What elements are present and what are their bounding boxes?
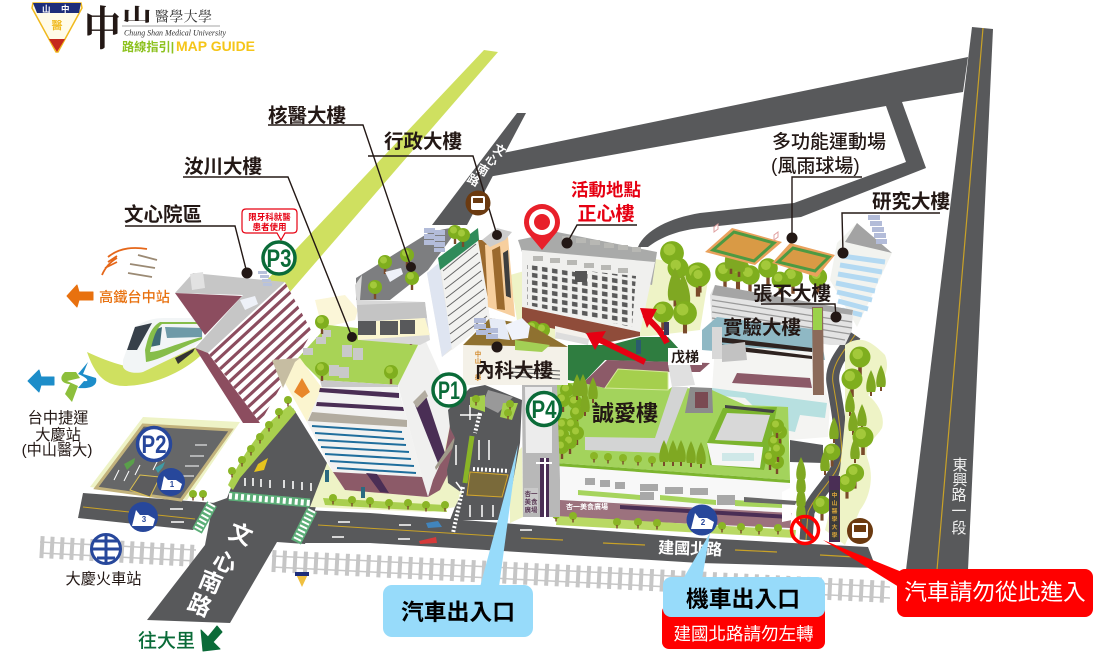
logo shield: 山 bbox=[42, 4, 51, 14]
building: internal medicine: 山 bbox=[475, 356, 481, 365]
road name: Wenxin South Road bbox=[184, 518, 256, 622]
logo: 山 bbox=[122, 1, 152, 27]
label: high speed rail station bbox=[67, 285, 170, 307]
building: nuclear medicine and administration bbox=[355, 225, 515, 357]
label: Ruchuan building: 汝川大樓 bbox=[184, 156, 262, 178]
label: high speed rail station: 高鐵台中站 bbox=[99, 289, 170, 306]
road name: Dongxing Road section 1: 路 bbox=[951, 487, 967, 504]
campus gate sign: 山 bbox=[832, 499, 838, 507]
pedestrians bbox=[636, 322, 669, 354]
red route arrows bbox=[586, 308, 667, 362]
road: Dongxing Road bbox=[906, 27, 993, 570]
label: Cheng Ai building: 誠愛樓 bbox=[592, 401, 658, 426]
label: wind and rain court: (風雨球場) bbox=[771, 155, 860, 177]
building: research bbox=[830, 215, 892, 327]
badge: P3 parking with note bbox=[242, 209, 297, 274]
logo: 路線指引| bbox=[122, 39, 174, 54]
lime rail swoosh bbox=[87, 50, 498, 386]
building: internal medicine: 學 bbox=[475, 373, 482, 382]
light green grounds bbox=[90, 250, 887, 545]
building: internal medicine: 中 bbox=[475, 349, 481, 358]
small crest near rail bbox=[295, 572, 309, 587]
campus gate sign: 中 bbox=[832, 491, 838, 499]
label: Zhang Bu building: 張不大樓 bbox=[753, 283, 831, 305]
label: internal medicine building: 內科大樓 bbox=[475, 360, 553, 382]
building: Wenxin campus bbox=[175, 271, 311, 423]
icon: metro direction bbox=[28, 362, 96, 402]
event location heading: 正心樓 bbox=[577, 203, 635, 225]
campus gate sign bbox=[829, 476, 840, 542]
label: Wu stairs: 戊梯 bbox=[671, 349, 699, 365]
roads bbox=[78, 27, 993, 623]
building labels bbox=[124, 104, 950, 426]
label: Taichung MRT station: 大慶站 bbox=[35, 426, 81, 444]
leader lines bbox=[125, 125, 940, 352]
decor: high speed rail wind lines bbox=[102, 248, 157, 277]
callout: scooter entrance bbox=[663, 533, 825, 617]
label: to Dali direction bbox=[138, 626, 222, 652]
sports courts bbox=[705, 224, 835, 277]
road name: Wenxin South Road: 文 bbox=[225, 518, 256, 551]
building: Zhengxin bbox=[518, 232, 657, 345]
label: to Dali direction: 往大里 bbox=[138, 630, 195, 652]
road name: Dongxing Road section 1: 段 bbox=[951, 520, 967, 537]
label: Taichung MRT station: 台中捷運 bbox=[28, 410, 88, 427]
light rail train bbox=[123, 318, 203, 373]
icon: red location pin bbox=[524, 204, 560, 250]
badge: scooter parking 1: 1 bbox=[170, 480, 175, 489]
campus gate sign: 學 bbox=[832, 515, 838, 523]
label: research building: 研究大樓 bbox=[872, 191, 950, 213]
badge: P3 parking with note: 患者使用 bbox=[252, 222, 287, 232]
label: laboratory building: 實驗大樓 bbox=[723, 316, 801, 339]
event location heading bbox=[571, 180, 641, 225]
label: Wenxin campus: 文心院區 bbox=[124, 203, 202, 226]
road name: upper Wenxin South Road: 路 bbox=[465, 170, 483, 189]
icon: bus stop 2 bbox=[847, 518, 873, 544]
logo shield: 醫 bbox=[52, 19, 62, 32]
badge: scooter parking 2: 2 bbox=[701, 518, 706, 527]
right lane trees bbox=[796, 346, 886, 523]
logo shield: 中 bbox=[61, 4, 70, 14]
road name: Dongxing Road section 1: 東 bbox=[952, 457, 968, 474]
road name: Dongxing Road section 1: 興 bbox=[952, 472, 968, 489]
campus gate sign: 學 bbox=[832, 531, 838, 539]
logo: 醫學大學 bbox=[155, 6, 212, 26]
campus gate sign: 大 bbox=[832, 523, 838, 531]
badge: P3 parking with note: 限牙科就醫 bbox=[248, 212, 291, 222]
small food court sign: 美食 bbox=[524, 497, 538, 506]
railway track bbox=[40, 542, 890, 598]
road name: Dongxing Road section 1: 一 bbox=[951, 503, 967, 520]
road markings bbox=[83, 28, 983, 570]
icon: Taiwan railway logo bbox=[92, 534, 120, 564]
callout: car entrance: 汽車出入口 bbox=[401, 599, 515, 625]
label: Taichung MRT station: (中山醫大) bbox=[22, 442, 92, 459]
logo: Chung Shan Medical University bbox=[124, 28, 226, 38]
callout: no cars warning: 汽車請勿從此進入 bbox=[904, 579, 1086, 605]
logo: MAP GUIDE bbox=[176, 38, 255, 54]
road: winding service lane bbox=[806, 335, 855, 540]
campus gate sign: 醫 bbox=[832, 507, 838, 515]
road: upper Wenxin South Road bbox=[432, 113, 526, 225]
badge: scooter parking 3: 3 bbox=[142, 515, 147, 524]
road name: upper Wenxin South Road bbox=[465, 140, 509, 189]
logo bbox=[32, 0, 255, 58]
building: Ruchuan bbox=[272, 295, 460, 497]
road name: Jianguo North Road: 建國北路 bbox=[658, 538, 723, 559]
road: north lane bbox=[488, 57, 968, 247]
callout: no left turn warning bbox=[662, 605, 825, 649]
badge: P1 parking bbox=[433, 374, 465, 406]
small food court sign: 廣場 bbox=[524, 505, 538, 514]
label: nuclear medicine building: 核醫大樓 bbox=[268, 104, 346, 127]
badge: P3 parking with note: P3 bbox=[266, 245, 292, 273]
label: administration building: 行政大樓 bbox=[384, 131, 462, 153]
label: Daqing railway station: 大慶火車站 bbox=[66, 570, 141, 588]
road: Jianguo North Road east bbox=[300, 510, 876, 568]
callout: no left turn warning: 建國北路請勿左轉 bbox=[674, 624, 814, 644]
badge: P1 parking: P1 bbox=[438, 377, 460, 405]
road name: Wenxin South Road: 心 bbox=[209, 546, 240, 579]
trees north of campus bbox=[526, 240, 827, 342]
road name: Wenxin South Road: 路 bbox=[184, 589, 215, 622]
building: Zhang Bu bbox=[710, 285, 853, 345]
icon: no entry sign bbox=[792, 516, 818, 544]
badge: P4 parking: P4 bbox=[532, 396, 557, 424]
parking lot P2 bbox=[96, 425, 231, 500]
badge: P2 parking: P2 bbox=[142, 431, 166, 459]
label: multipurpose sports field: 多功能運動場 bbox=[772, 131, 886, 153]
road name: upper Wenxin South Road: 心 bbox=[483, 151, 500, 169]
label: Taichung MRT station bbox=[22, 410, 92, 459]
driveway and junction bbox=[447, 385, 560, 533]
badge: scooter parking 2 bbox=[686, 504, 718, 536]
icon: metro stop 1 bbox=[466, 190, 490, 216]
callout: scooter entrance: 機車出入口 bbox=[686, 586, 800, 612]
callout: car entrance bbox=[383, 445, 533, 637]
road: Wenxin South Road bbox=[147, 408, 327, 623]
food court sign front: 杏一美食廣場 bbox=[566, 502, 608, 511]
building: laboratory bbox=[702, 307, 830, 440]
road: Jianguo North Road west bbox=[78, 493, 215, 530]
building: internal medicine bbox=[463, 318, 568, 385]
event location heading: 活動地點 bbox=[571, 180, 641, 200]
small food court sign: 杏一 bbox=[524, 489, 538, 498]
building: Cheng Ai bbox=[552, 337, 823, 538]
badge: scooter parking 1 bbox=[157, 468, 185, 496]
badge: scooter parking 3 bbox=[128, 502, 158, 532]
road name: upper Wenxin South Road: 文 bbox=[491, 140, 509, 159]
logo shield bbox=[32, 3, 82, 52]
roadside hedge with trees bbox=[228, 396, 449, 544]
road name: upper Wenxin South Road: 南 bbox=[474, 161, 491, 179]
callout: no cars warning bbox=[823, 540, 1093, 617]
road name: Wenxin South Road: 南 bbox=[195, 566, 226, 599]
